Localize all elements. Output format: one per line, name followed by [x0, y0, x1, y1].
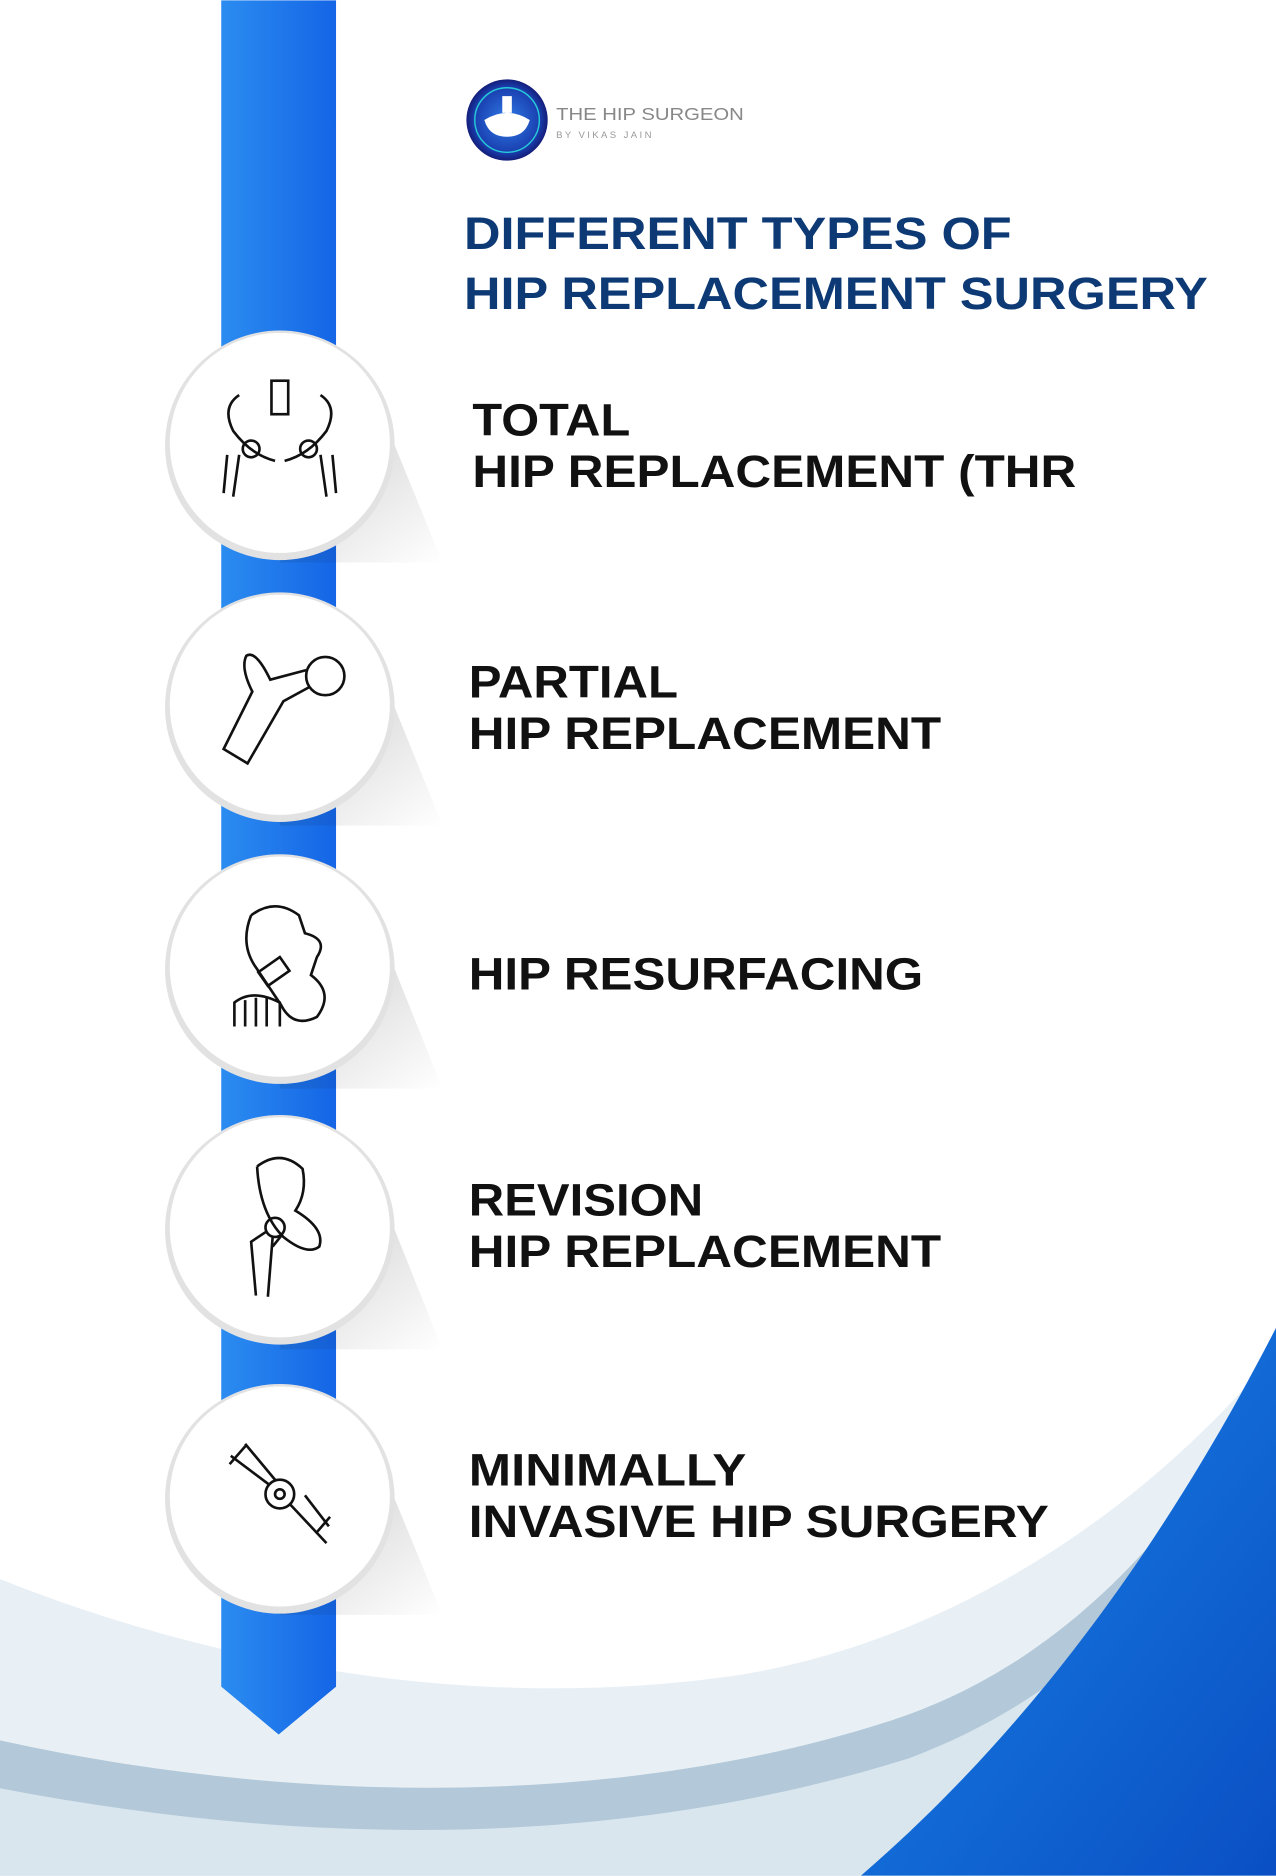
- icon: resurfaced hip: [234, 906, 325, 1026]
- logo: THE HIP SURGEON: [556, 104, 744, 124]
- icon: joint: [230, 1444, 330, 1543]
- item 1: total hip replacement: [165, 330, 1076, 562]
- icon: hip with implant: [251, 1158, 320, 1297]
- item 1: total hip replacement: HIP REPLACEMENT (THR: [472, 446, 1076, 497]
- item 2: partial hip replacement: [165, 592, 941, 826]
- icon: femur with ball: [224, 655, 344, 763]
- item 5: minimally invasive hip surgery: [165, 1384, 1049, 1615]
- title: [464, 208, 1208, 319]
- item 3: hip resurfacing: HIP RESURFACING: [469, 948, 923, 999]
- item 4: revision hip replacement: [165, 1115, 941, 1349]
- title: DIFFERENT TYPES OF: [464, 208, 1012, 259]
- title: HIP REPLACEMENT SURGERY: [464, 268, 1208, 319]
- item 3: hip resurfacing: [165, 854, 923, 1089]
- background waves: [0, 1328, 1276, 1876]
- item 1: total hip replacement: TOTAL: [472, 395, 630, 446]
- item 4: revision hip replacement: HIP REPLACEMENT: [469, 1226, 941, 1277]
- logo: BY VIKAS JAIN: [556, 130, 654, 141]
- item 5: minimally invasive hip surgery: MINIMALLY: [469, 1445, 746, 1496]
- vertical timeline bar with arrow: [221, 0, 336, 1734]
- item 5: minimally invasive hip surgery: INVASIVE HIP SURGERY: [469, 1496, 1049, 1547]
- logo: [466, 79, 744, 161]
- icon: pelvis: [224, 381, 336, 497]
- item 2: partial hip replacement: HIP REPLACEMENT: [469, 708, 941, 759]
- item 4: revision hip replacement: REVISION: [469, 1174, 703, 1225]
- item 2: partial hip replacement: PARTIAL: [469, 657, 678, 708]
